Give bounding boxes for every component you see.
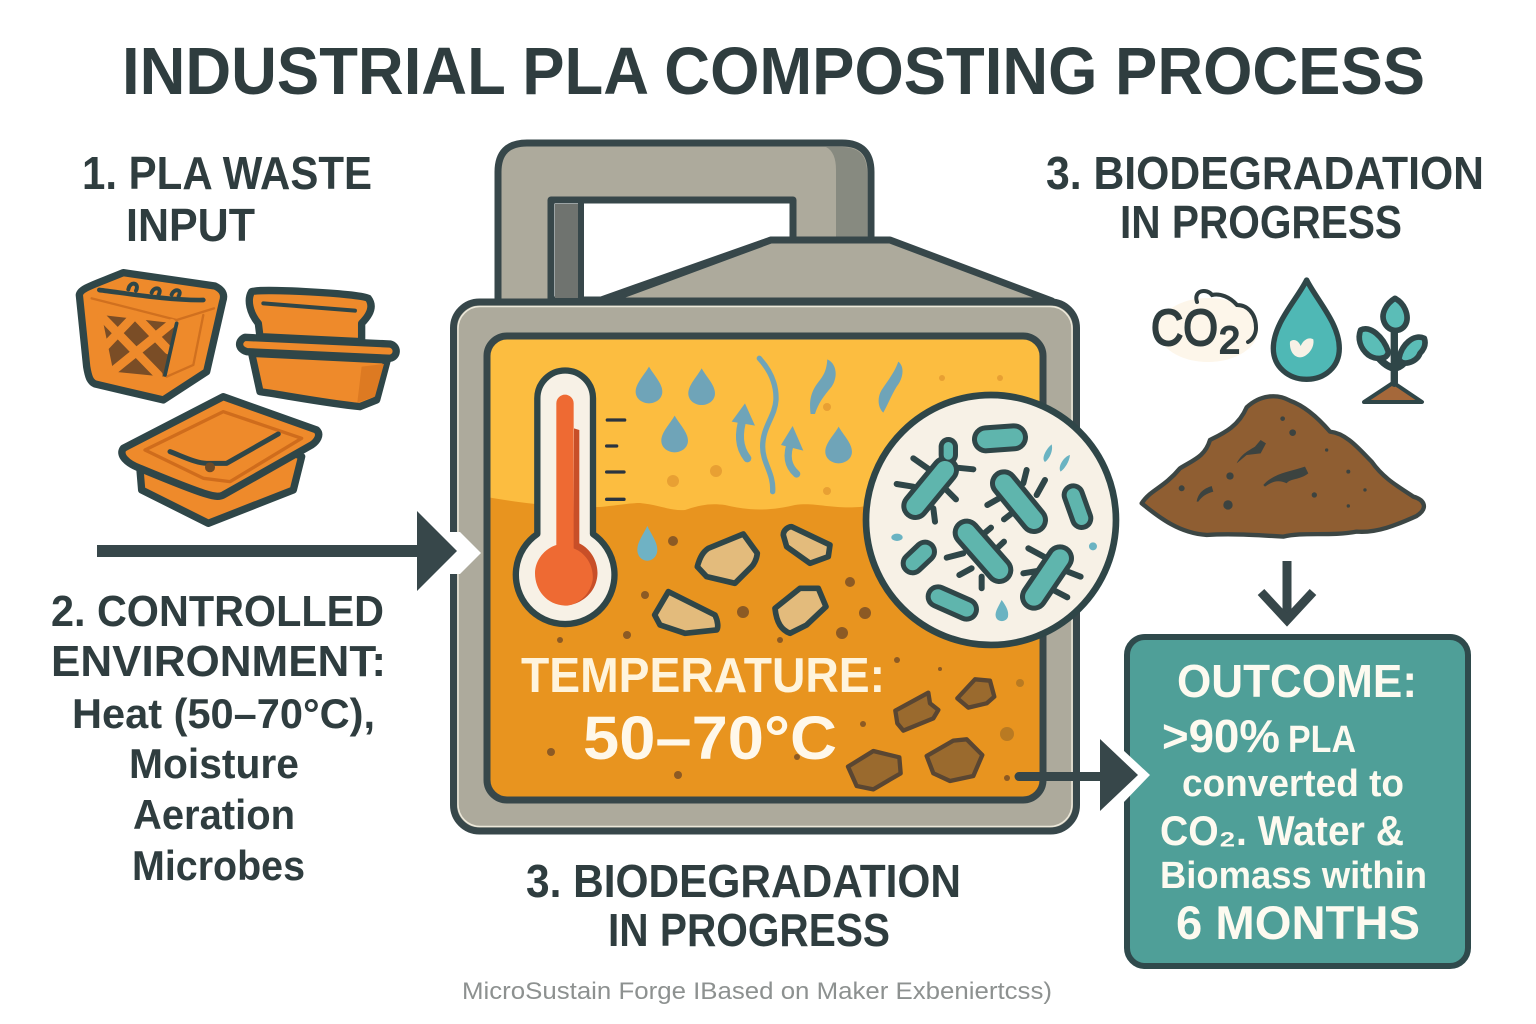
heading: step 3 biodegradation top right [1046,147,1484,248]
icon: water droplet [1273,280,1339,379]
icon: CO2 cloud: CO [1151,299,1218,356]
heading: step 3 biodegradation under vessel: IN PROGRESS [608,904,890,956]
heading: step 2 controlled environment: Heat (50–70°C), [72,690,375,737]
icon: seedling [1359,298,1425,402]
icon: flat tray [122,397,319,523]
panel: outcome [1127,637,1468,966]
heading: step 2 controlled environment: ENVIRONMENT: [51,637,386,686]
temperature label [521,649,885,772]
heading: step 3 biodegradation under vessel [526,855,961,956]
outcome text: converted to [1182,763,1404,805]
outcome text: 6 MONTHS [1176,896,1420,949]
heading: step 2 controlled environment: 2. CONTROLLED [51,587,384,636]
icon: thermometer [516,370,625,624]
microbe legs [897,458,1081,597]
magnified microbes circle [866,395,1116,645]
icon: compost pile [1142,396,1424,537]
heading: step 2 controlled environment: Moisture [129,740,299,787]
outcome text: OUTCOME: [1177,655,1417,707]
arrow: composter to outcome [1014,739,1138,811]
speckles in the air layer [667,375,1003,495]
heading: step 3 biodegradation top right: IN PROGRESS [1120,196,1402,248]
thermometer tick marks [607,420,625,499]
vessel handle [498,143,871,302]
heading: step 2 controlled environment: Aeration [133,791,295,838]
heading: step 1 PLA waste input: INPUT [126,199,255,251]
title: INDUSTRIAL PLA COMPOSTING PROCESS [122,34,1425,109]
white notch at inlet [440,532,481,574]
temperature label: 50–70°C [583,704,837,772]
white notch at outcome entry [1118,750,1150,803]
compost chamber [487,336,1043,800]
icon: CO2 cloud [1151,291,1258,362]
outcome text: PLA [1288,719,1356,761]
water specks [891,444,1097,621]
icon: CO2 cloud: 2 [1219,320,1240,362]
brown compost chunks [848,679,994,789]
arrow: input to composter [97,511,457,591]
icon: water drops and rising vapour [636,358,903,561]
heading: step 2 controlled environment [51,587,386,889]
outcome text: CO₂. Water & [1160,807,1404,854]
icon: stacked tubs [240,291,396,407]
outcome text: >90% [1162,710,1280,762]
outcome text: Biomass within [1160,855,1427,897]
heading: step 2 controlled environment: Microbes [132,842,305,889]
heading: step 3 biodegradation top right: 3. BIODEGRADATION [1046,147,1484,199]
icon: lattice basket [79,273,224,400]
heading: step 1 PLA waste input [82,147,372,251]
icon: PLA containers [79,273,396,523]
heading: step 3 biodegradation under vessel: 3. BIODEGRADATION [526,855,961,907]
composter vessel [454,143,1076,831]
footer credit: MicroSustain Forge IBased on Maker Exbeniertcss) [462,978,1052,1005]
arrow: pile down to outcome [1261,561,1313,620]
specks in the soil [547,536,1024,781]
outcome text [1160,655,1427,949]
vessel body [454,302,1076,831]
microbe bodies [913,437,1082,609]
heading: step 1 PLA waste input: 1. PLA WASTE [82,147,372,199]
icon: PLA fragments in soil [655,527,830,633]
vessel roof [606,240,1052,301]
temperature label: TEMPERATURE: [521,649,885,703]
